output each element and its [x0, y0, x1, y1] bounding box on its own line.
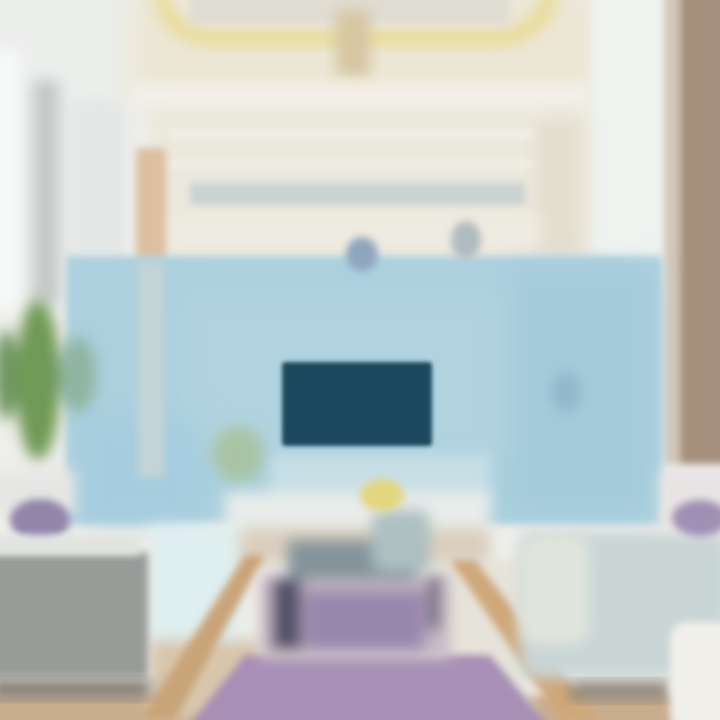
grey sofa left: [0, 535, 150, 698]
pale column in front of wall: [138, 262, 164, 477]
floor wood: [0, 695, 720, 720]
tall green plant: [0, 300, 96, 460]
purple cushion left: [10, 499, 70, 541]
television: [282, 362, 432, 446]
purple cushion right: [672, 500, 720, 536]
purple rug: [185, 655, 552, 720]
small plant: [212, 426, 264, 482]
shelf vase: blue: [346, 237, 378, 271]
ceiling with gold ring: [130, 0, 600, 110]
floor strips beside rug: [140, 555, 600, 720]
white ottoman: [670, 622, 720, 720]
yellow flowers: [360, 479, 404, 511]
right sofa: [520, 470, 720, 700]
blue accent wall: [66, 256, 662, 524]
plant pot and left side table: [0, 470, 75, 515]
right brown column: [664, 0, 720, 465]
white sofa back centre: [150, 492, 530, 720]
shelving wall: [150, 108, 590, 258]
coffee table: [260, 540, 450, 660]
shelf books band: [190, 183, 525, 205]
wooden upright: [136, 148, 166, 260]
shelf vase: grey: [451, 221, 481, 259]
left white wall and column: [0, 0, 150, 310]
right white column: [592, 0, 666, 260]
wall bracket detail: [551, 372, 581, 412]
vase on table: [372, 510, 430, 572]
